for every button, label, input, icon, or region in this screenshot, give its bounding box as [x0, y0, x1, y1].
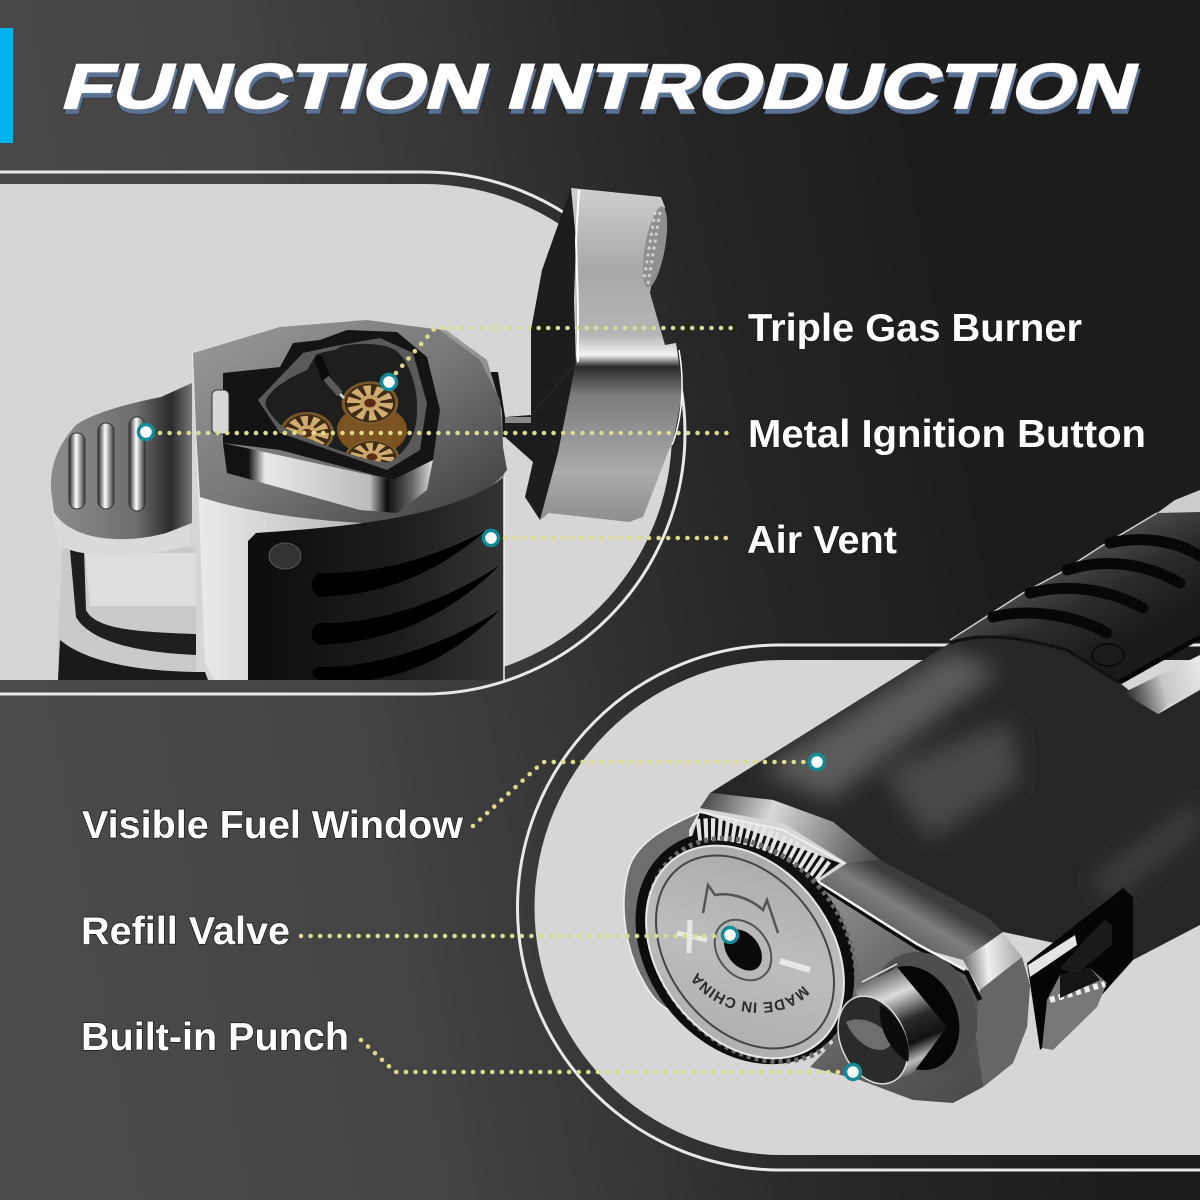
collar band	[700, 793, 880, 872]
punch cylinder	[825, 935, 997, 1095]
side slider window	[1027, 888, 1133, 1050]
leader: refill valve	[301, 934, 720, 938]
hinge	[445, 372, 560, 457]
plus mark	[677, 920, 707, 953]
panel: bottom lighter close-up	[518, 645, 1200, 1170]
title: FUNCTION INTRODUCTION	[55, 51, 1147, 122]
front plate	[810, 883, 1030, 1103]
marker: metal ignition button	[138, 424, 154, 440]
rubber grip	[248, 477, 504, 680]
leader: built-in punch	[361, 1040, 845, 1072]
gray front band	[817, 860, 1003, 960]
lid	[505, 188, 683, 522]
direction arrow	[703, 885, 778, 933]
label: built-in punch: Built-in Punch	[81, 1016, 349, 1059]
marker: built-in punch	[846, 1064, 860, 1080]
label: metal ignition button: Metal Ignition Button	[748, 413, 1146, 456]
burner housing	[212, 330, 440, 513]
accent bar	[0, 28, 13, 143]
burner gears	[280, 360, 407, 475]
marker: air vent	[484, 530, 498, 546]
lower frame	[58, 547, 208, 680]
leader: visible fuel window	[473, 762, 808, 826]
left clip	[624, 812, 700, 1012]
marker: triple gas burner	[382, 374, 396, 390]
marker: visible fuel window	[810, 754, 824, 770]
valve disc	[645, 844, 845, 1060]
chrome body	[192, 320, 504, 680]
label: triple gas burner: Triple Gas Burner	[748, 307, 1082, 350]
minus mark	[780, 961, 810, 970]
label: air vent: Air Vent	[747, 519, 897, 562]
leader: triple gas burner	[396, 328, 733, 373]
engraved text	[700, 975, 803, 1003]
knurled ring	[590, 788, 900, 1108]
leader: air vent	[505, 536, 733, 540]
lighter: base with refill valve and punch	[623, 490, 1200, 1103]
label: refill valve: Refill Valve	[81, 910, 290, 953]
chrome corner	[963, 933, 1022, 990]
valve hole	[703, 909, 783, 991]
top plate	[193, 320, 507, 523]
leader: metal ignition button	[160, 431, 733, 435]
ignition button	[51, 383, 192, 556]
grip section	[950, 490, 1200, 714]
panel: top lighter close-up	[0, 172, 685, 694]
lighter: open head with triple burner	[51, 188, 683, 680]
valve disc: MADE IN CHINA	[692, 972, 810, 1013]
lighter body	[710, 633, 1200, 960]
label: visible fuel window: Visible Fuel Window	[82, 804, 464, 847]
marker: refill valve	[722, 928, 738, 942]
